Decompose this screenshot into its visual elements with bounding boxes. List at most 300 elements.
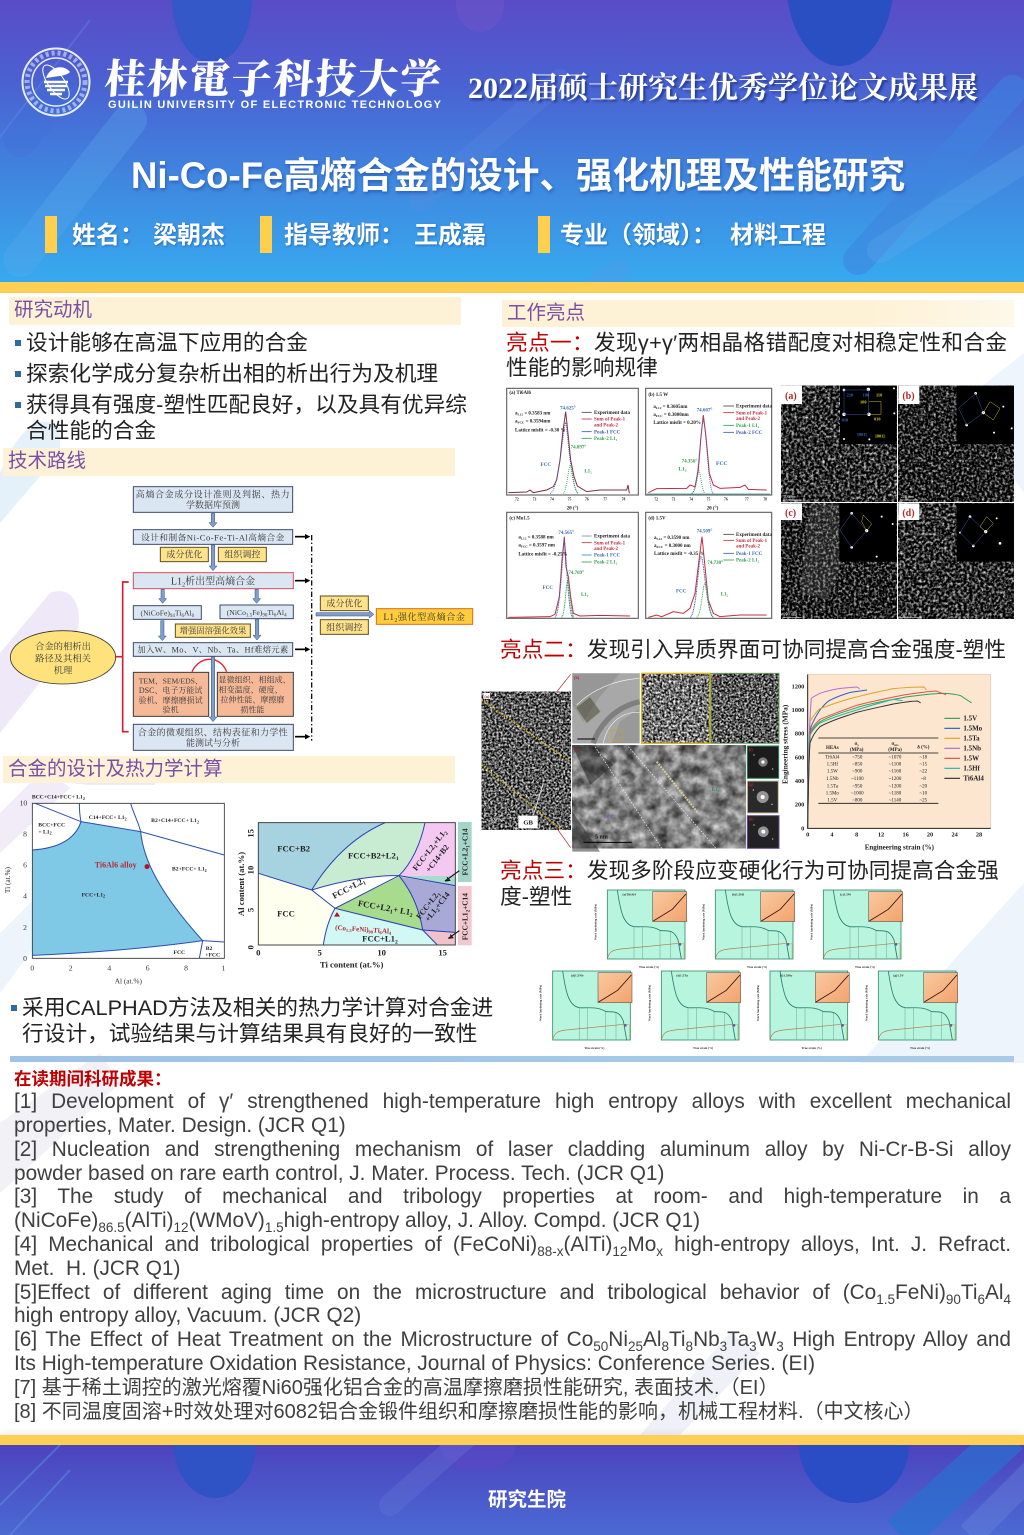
university english name: GUILIN UNIVERSITY OF ELECTRONIC TECHNOLOGY [108, 99, 442, 111]
flowchart: technical route: 相变温度、硬度、 [219, 685, 283, 695]
flowchart: technical route: (NiCoFe) [141, 608, 170, 617]
micrograph: TEM a: 100 [860, 399, 866, 404]
chart: XRD a: Experiment data [594, 411, 630, 416]
chart: XRD d: = 0.3000 nm [663, 544, 691, 549]
chart: Ti-Al phase diagram right: 1 [433, 843, 440, 850]
chart: engineering stress-strain curves: 28 [976, 831, 982, 838]
chart: XRD b: a [653, 413, 656, 418]
chart: engineering stress-strain curves: ~10 [919, 792, 928, 797]
flowchart: technical route: 90 [262, 614, 268, 619]
section heading: work highlights: 工作亮点 [507, 302, 585, 324]
chart: Ti-Al phase diagram left: 6 [23, 861, 27, 870]
flowchart: technical route: 6 [181, 614, 184, 619]
chart: XRD c: = 0.3597 nm [528, 544, 556, 549]
footer organisation name: 研究生院 [488, 1489, 566, 1511]
flowchart: technical route: DSC、电子万能试 [139, 685, 202, 695]
chart: Ti-Al phase diagram right: 2 [466, 909, 471, 912]
chart: XRD b: FCC [656, 414, 663, 418]
chart: Ti-Al phase diagram left: B2 [206, 946, 212, 952]
chart: Ti-Al phase diagram right: FCC+B2+L2 [348, 850, 396, 860]
chart: Ti-Al phase diagram right: 10 [377, 948, 386, 958]
publications list: [7] 基于稀土调控的激光熔覆Ni60强化铝合金的高温摩擦磨损性能研究, 表面技术.（EI） [14, 1377, 778, 1399]
publications list: high entropy alloy, Vacuum. (JCR Q2) [14, 1304, 361, 1327]
micrograph: TEM a: 200 nm [783, 494, 797, 499]
chart: Ti-Al phase diagram left: 2 [23, 923, 27, 932]
chart: Ti-Al phase diagram right: FCC+L2 [331, 877, 364, 901]
chart: engineering stress-strain curves: ~1180 [889, 792, 902, 797]
chart: Ti-Al phase diagram left: 8 [23, 830, 27, 839]
chart: 1.5W: Work hardening rate (MPa) [809, 904, 813, 940]
flowchart: technical route: 拉伸性能、摩擦磨 [220, 695, 284, 705]
highlight one text: 性能的影响规律 [506, 355, 658, 380]
chart: Ti-Al phase diagram left: 2 [197, 819, 199, 824]
chart: XRD b: 73 [672, 498, 675, 502]
university logo [22, 48, 90, 116]
micrograph: TEM a: [001] [857, 432, 867, 437]
chart: XRD a: FCC [518, 421, 525, 425]
chart: XRD d: Lattice misfit = -0.35 % [654, 552, 704, 557]
chart: XRD d [646, 512, 772, 618]
chart: engineering stress-strain curves: Ti6Al4 [825, 755, 840, 760]
image c: (c) [643, 675, 648, 680]
chart: Ti-Al phase diagram right: FCC+L2 [411, 843, 437, 872]
image e: (e) [574, 747, 579, 752]
flowchart: technical route: 设计和制备Ni-Co-Fe-Ti-Al高熵合金 [141, 531, 285, 542]
publications list: [4] Mechanical and tribological properties of (FeCoNi)88-x(AlTi)12Mox high-entropy alloys, Int. J. Refract. [14, 1233, 1011, 1259]
micrograph: TEM c: 200 nm [783, 611, 797, 616]
flowchart: technical route: 6 [192, 614, 195, 619]
flowchart: technical route: Fe) [252, 608, 263, 617]
chart: engineering stress-strain curves: 1200 [792, 683, 804, 690]
image h [747, 816, 779, 848]
motivation bullet list: 获得具有强度-塑性匹配良好，以及具有优异综 [26, 392, 467, 417]
CALPHAD statement: 采用CALPHAD方法及相关的热力学计算对合金进 [22, 995, 493, 1020]
highlight two text: 亮点二：发现引入异质界面可协同提高合金强度-塑性 [500, 637, 1006, 662]
chart: engineering stress-strain curves: ~1000 [851, 792, 864, 797]
chart: engineering stress-strain curves: 400 [795, 778, 804, 785]
chart: Ti-Al phase diagram right: 1 [437, 892, 443, 898]
micrograph: TEM b: (b) [902, 391, 915, 402]
micrograph: TEM c: (c) [785, 508, 796, 519]
flowchart: technical route: 增强固溶强化效果 [180, 625, 247, 635]
chart: engineering stress-strain curves: (MPa) [850, 748, 864, 753]
chart: XRD c: and Peak-2 [594, 547, 619, 552]
highlight one text: 亮点一：发现γ+γ′两相晶格错配度对相稳定性和合金 [506, 330, 1007, 355]
chart: Ti-Al phase diagram left: Al (at.%) [115, 976, 143, 985]
chart: engineering stress-strain curves: 1.5Hf [827, 763, 838, 768]
flowchart: technical route: 2 [182, 581, 185, 588]
chart: engineering stress-strain curves: ~1100 [889, 763, 902, 768]
chart: XRD b: (b) 1.5 W [648, 393, 668, 398]
chart: XRD a: 76 [585, 498, 589, 502]
chart: 1.5W: True strain (%) [855, 965, 875, 969]
chart: 1.5Nb [539, 971, 632, 1050]
chart: XRD a: (a) Ti6Al6 [509, 391, 531, 396]
chart: 1.5Mo [756, 971, 849, 1050]
chart: XRD a: a [515, 411, 518, 416]
chart: XRD a: 75 [568, 498, 571, 502]
chart: XRD c: Lattice misfit = -0.25% [518, 552, 568, 557]
chart: engineering stress-strain curves: 24 [952, 831, 959, 838]
XRD plots and TEM micrographs [506, 386, 1014, 619]
chart: Ti-Al phase diagram right [236, 822, 472, 970]
chart: XRD d: 74.730° [707, 561, 723, 566]
chart: 1.5Mo: (f)1.5Mo [780, 973, 793, 977]
author info row: 专业（领域）： [560, 222, 716, 249]
image e: L1₂ [712, 788, 720, 793]
micrograph: TEM d [898, 503, 1014, 619]
image e [572, 745, 746, 852]
chart: XRD b: Peak-1 L1₂ [736, 424, 760, 429]
chart: XRD c: 74.565° [558, 531, 574, 536]
chart: engineering stress-strain curves: 0 [801, 825, 804, 832]
micrograph: TEM a: 110 [876, 393, 882, 398]
section heading: work highlights [502, 300, 1014, 327]
publications list: [2] Nucleation and strengthening mechanism of laser cladding aluminum alloy by Ni-Cr-B-Si alloy [14, 1138, 1011, 1161]
micrograph: TEM a: 010 [874, 417, 880, 422]
chart: XRD a: L1₂ [584, 470, 592, 475]
chart: Ti6Al4 [593, 890, 687, 969]
chart: XRD b: = 0.3605nm [661, 405, 688, 410]
chart: engineering stress-strain curves: 0 [806, 831, 809, 838]
chart: Ti-Al phase diagram right: 1 [466, 845, 471, 848]
chart: XRD a: a [515, 420, 518, 425]
chart: engineering stress-strain curves: 1.5V [963, 715, 977, 723]
image a: (a) [484, 694, 490, 699]
chart: XRD c: (c) Mo1.5 [509, 516, 530, 521]
chart: XRD a: 2θ (°) [567, 506, 579, 511]
chart: Ti-Al phase diagram left: 2 [103, 894, 105, 899]
chart: engineering stress-strain curves: (MPa) [888, 748, 902, 753]
chart: engineering stress-strain curves: 8 [855, 831, 858, 838]
highlight three text: 亮点三：发现多阶段应变硬化行为可协同提高合金强 [500, 858, 999, 883]
chart: engineering stress-strain curves: 1.5W [963, 755, 979, 763]
chart: Ti-Al phase diagram right: 5 [318, 948, 323, 958]
chart: 1.5V: True strain (%) [910, 1046, 930, 1050]
micrograph: TEM a [781, 386, 897, 502]
micrograph: TEM a: 010 [842, 418, 848, 423]
chart: XRD a [507, 388, 638, 511]
chart: XRD a: Peak-1 FCC [594, 430, 621, 435]
flowchart: technical route: 1.5 [246, 614, 253, 619]
chart: XRD a: 74.625° [560, 406, 576, 411]
header banner [0, 0, 1024, 282]
chart: engineering stress-strain curves: Ti6Al4 [963, 775, 984, 783]
chart: 1.5Hf [701, 890, 795, 969]
image d: (d) [712, 675, 718, 680]
chart: XRD b: L12 [656, 406, 662, 410]
image g [747, 781, 778, 813]
chart: XRD a: = 0.3594nm [524, 420, 551, 425]
chart: Ti-Al phase diagram right: +L1 [423, 907, 439, 923]
chart: XRD b: = 0.3000nm [663, 413, 690, 418]
chart: XRD a: L12 [518, 412, 523, 416]
chart: Ti-Al phase diagram right: (Co [335, 924, 346, 932]
chart: Ti-Al phase diagram left: 0 [23, 954, 27, 963]
chart: Ti-Al phase diagram left: BCC+FCC [38, 823, 65, 829]
chart: Ti-Al phase diagram right: 2 [435, 907, 442, 913]
chart: 1.5W [809, 890, 903, 969]
chart: XRD c: L1₂ [581, 593, 589, 598]
chart: Ti-Al phase diagram right: 0 [256, 948, 260, 958]
micrograph: TEM d: (d) [902, 508, 915, 519]
chart: XRD b: and Peak-2 [736, 417, 761, 422]
publications list: Met. H. (JCR Q1) [14, 1257, 180, 1280]
section heading: research motivation: 研究动机 [14, 299, 92, 321]
chart: engineering stress-strain curves: ~20 [919, 784, 928, 789]
publications list: (NiCoFe)86.5(AlTi)12(WMoV)1.5high-entropy alloy, J. Alloy. Compd. (JCR Q1) [14, 1209, 700, 1235]
chart: Ti-Al phase diagram right: FCC+L2 [414, 891, 440, 921]
chart: XRD a: Sum of Peak-1 [594, 418, 626, 423]
chart: XRD b: 2θ (°) [707, 506, 719, 511]
author info row: 梁朝杰 [153, 222, 225, 249]
chart: 1.5Ta: True strain (%) [693, 1046, 713, 1050]
flowchart: technical route: 析出型高熵合金 [185, 574, 255, 587]
chart: XRD b: Lattice misfit = 0.20% [653, 421, 701, 426]
chart: engineering stress-strain curves: δ (%) [917, 745, 930, 750]
motivation bullet list: 探索化学成分复杂析出相的析出行为及机理 [26, 361, 438, 386]
section heading: alloy design and thermodynamic calculation [3, 756, 455, 783]
chart: engineering stress-strain curves: ~1200 [889, 784, 902, 789]
chart: 1.5Mo: True strain (%) [802, 1046, 822, 1050]
micrograph: TEM a: [001] [875, 433, 885, 438]
chart: Ti6Al4: True strain (%) [639, 965, 659, 969]
flowchart: technical route: Al [276, 608, 284, 617]
chart: engineering stress-strain curves: 1.5Hf [963, 765, 981, 773]
flowchart: technical route: 组织调控 [224, 549, 260, 560]
chart: Ti6Al4: (a)Ti6Al4 [622, 892, 636, 896]
chart: engineering stress-strain curves: ~950 [852, 784, 863, 789]
image a: GB [523, 819, 534, 826]
chart: engineering stress-strain curves: σ [854, 742, 857, 747]
chart: XRD a: Peak-2 L1₂ [594, 437, 618, 442]
chart: Ti-Al phase diagram right: 90 [368, 930, 374, 936]
flowchart: technical route: L1 [171, 576, 182, 587]
chart: XRD a: FCC [541, 463, 551, 468]
chart: Ti-Al phase diagram right: 5 [245, 907, 255, 912]
chart: Ti-Al phase diagram left: 2 [83, 796, 85, 801]
chart: XRD c [507, 512, 638, 618]
chart: Ti-Al phase diagram left: 8 [184, 963, 188, 972]
flowchart: technical route: Al [184, 608, 192, 617]
chart: 1.5Ta: Work hardening rate (MPa) [647, 985, 651, 1021]
publications list: [8] 不同温度固溶+时效处理对6082铝合金锻件组织和摩擦磨损性能的影响，机械工程材料.（中文核心） [14, 1401, 924, 1423]
chart: engineering stress-strain curves: 16 [903, 831, 909, 838]
chart: Ti-Al phase diagram right: FCC+L1 [362, 934, 395, 944]
micrograph: TEM a: (a) [785, 391, 797, 402]
publications list: [5]Effect of different aging time on the microstructure and tribological behavior of (Co1.5FeNi)90Ti6Al4 [14, 1281, 1011, 1307]
chart: XRD c: FCC [543, 586, 553, 591]
micrograph: TEM c [781, 503, 897, 619]
chart: XRD d: a [654, 544, 656, 549]
chart: engineering stress-strain curves: ~750 [852, 755, 863, 760]
chart: Ti-Al phase diagram left: 2 [125, 816, 127, 821]
chart: XRD b: Experiment data [736, 405, 772, 410]
chart: XRD d: 74.509° [697, 530, 712, 535]
flowchart: technical route: 验机、摩擦磨损试 [139, 695, 203, 705]
micrograph: TEM b: 200 nm [901, 494, 914, 499]
chart: Ti-Al phase diagram right: 2 [443, 830, 450, 836]
flowchart: technical route: 能测试与分析 [186, 737, 240, 748]
chart: engineering stress-strain curves: ~25 [919, 799, 928, 804]
publications list: powder based on rare earth control, J. Mater. Process. Tech. (JCR Q1) [14, 1162, 664, 1185]
chart: engineering stress-strain curves: 800 [795, 731, 804, 738]
flowchart: technical route: 6 [274, 614, 277, 619]
chart: Ti-Al phase diagram right: 1.5 [346, 929, 353, 934]
chart: engineering stress-strain curves: 1.5Ta [827, 784, 839, 789]
chart: Ti-Al phase diagram left: 6 [146, 963, 150, 972]
chart: XRD c: L12 [521, 536, 527, 540]
chart: XRD a: 74.897° [571, 445, 586, 450]
chart: Ti-Al phase diagram right: Ti content (at.%) [320, 960, 384, 970]
image e: FCC [604, 815, 615, 820]
chart: engineering stress-strain curves: 12 [878, 831, 884, 838]
chart: engineering stress-strain curves: Engineering strain (%) [865, 843, 935, 851]
publications list: [1] Development of γ′ strengthened high-temperature high entropy alloys with excellent mechanical [14, 1090, 1011, 1113]
image h: (h) [749, 817, 754, 822]
chart: Ti-Al phase diagram right: FCC+B2 [277, 844, 310, 854]
chart: 1.5Nb: Work hardening rate (MPa) [539, 985, 543, 1021]
chart: engineering stress-strain curves: 200 [795, 802, 804, 809]
publications list [14, 1090, 1011, 1423]
chart: Ti-Al phase diagram left: 0 [30, 963, 34, 972]
chart: Ti-Al phase diagram right: 1 [362, 880, 368, 887]
chart: Ti-Al phase diagram left: C14+FCC+ L1 [89, 815, 125, 821]
chart: Ti-Al phase diagram right: 2 [395, 939, 398, 945]
micrograph: TEM b [898, 386, 1014, 502]
author info row: 材料工程 [730, 222, 826, 249]
chart: Ti-Al phase diagram left: + L1 [38, 829, 50, 835]
chart: Ti-Al phase diagram right: + L1 [392, 904, 411, 917]
motivation bullet list: 设计能够在高温下应用的合金 [26, 330, 308, 355]
chart: Ti-Al phase diagram right: FeNi) [352, 925, 369, 934]
chart: engineering stress-strain curves: 1000 [792, 707, 804, 714]
publications list: [6] The Effect of Heat Treatment on the Microstructure of Co50Ni25Al8Ti8Nb3Ta3W3 High Entropy Alloy and [14, 1328, 1011, 1354]
flowchart: technical route: 损性能 [240, 704, 264, 714]
chart: Ti-Al phase diagram left: 1 [221, 963, 225, 972]
chart: XRD b: 78 [763, 498, 767, 502]
chart: engineering stress-strain curves: ~1100 [851, 777, 864, 782]
section heading: alloy design and thermodynamic calculation: 合金的设计及热力学计算 [8, 758, 223, 780]
chart: Ti-Al phase diagram right: +L1 [431, 830, 447, 846]
flowchart: technical route: 2 [394, 618, 398, 624]
flowchart: technical route: 组织调控 [326, 621, 362, 632]
chart: Ti-Al phase diagram left: 2 [205, 868, 207, 873]
author info row: 指导教师： [284, 222, 404, 249]
chart: XRD b: a [653, 405, 656, 410]
chart: 1.5Mo: Work hardening rate (MPa) [756, 985, 760, 1021]
image e: 5 nm [595, 834, 608, 840]
chart: Ti-Al phase diagram right: 1 [396, 856, 399, 862]
image a [482, 692, 571, 830]
micrograph: TEM d: 200 nm [901, 611, 914, 616]
CALPHAD statement: 行设计，试验结果与计算结果具有良好的一致性 [22, 1021, 477, 1046]
chart: XRD c: 74.769° [568, 571, 584, 576]
author info row: 王成磊 [414, 222, 486, 249]
chart: XRD c: Sum of Peak-1 [594, 541, 626, 546]
chart: XRD d: L1₂ [721, 592, 729, 597]
chart: XRD a: Lattice misfit = -0.30 % [515, 428, 565, 433]
flowchart: technical route: 验机 [163, 704, 179, 714]
image f [747, 746, 779, 778]
image a: 500 nm [490, 818, 504, 823]
chart: Ti-Al phase diagram right: 2 [409, 913, 413, 919]
micrographs: heterogeneous interface [481, 672, 780, 852]
poster title: Ni-Co-Fe高熵合金的设计、强化机理及性能研究 [131, 155, 905, 196]
section heading: technical route: 技术路线 [8, 450, 86, 472]
chart: XRD c: = 0.3588 nm [526, 535, 555, 540]
chart: engineering stress-strain curves: ~18 [919, 755, 928, 760]
chart: XRD b: FCC [716, 461, 728, 467]
exhibition title: 2022届硕士研究生优秀学位论文成果展 [468, 72, 978, 105]
chart: Ti-Al phase diagram left [3, 795, 225, 985]
chart: XRD b: 74.356° [682, 459, 697, 464]
chart: XRD d: Peak-1 FCC [736, 552, 763, 557]
chart: Ti-Al phase diagram left: 2 [50, 831, 52, 836]
flowchart: technical route: 4 [284, 614, 287, 619]
chart: 1.5Ta [647, 971, 741, 1050]
chart: engineering stress-strain curves: 1.5Mo [963, 725, 983, 733]
flowchart: technical route: 合金的微观组织、结构表征和力学性 [138, 726, 288, 737]
chart: 1.5Nb: (d)1.5Nb [571, 973, 584, 977]
top yellow band [0, 282, 1024, 293]
chart: Ti-Al phase diagram right: +C14 [461, 893, 470, 910]
chart: engineering stress-strain curves: ~800 [852, 799, 863, 804]
flowchart: technical route: L1 [383, 613, 394, 623]
chart: engineering stress-strain curves: ~850 [852, 763, 863, 768]
chart: XRD d: FCC [656, 545, 664, 549]
chart: 1.5V [864, 971, 958, 1050]
chart: XRD c: Experiment data [594, 535, 630, 540]
chart: Ti-Al phase diagram left: BCC+C14+FCC+ L1 [32, 795, 83, 801]
flowchart: technical route: 机理 [54, 665, 73, 677]
chart: XRD a: = 0.3583 nm [523, 411, 551, 416]
publications heading: 在读期间科研成果： [14, 1069, 172, 1089]
chart: XRD d: Peak-2 L1₂ [736, 559, 760, 564]
chart: XRD b: 75 [707, 498, 710, 502]
chart: XRD a: 74 [550, 498, 554, 502]
section heading: technical route [3, 448, 455, 476]
image g: (g) [749, 782, 754, 787]
chart: 1.5Hf: (b)1.5Hf [732, 892, 745, 896]
flowchart: technical route: 显微组织、相组成、 [219, 674, 291, 684]
flowchart: technical route: 路径及其相关 [35, 653, 91, 665]
chart: XRD b: 74 [689, 498, 693, 502]
chart: Ti-Al phase diagram right: FCC+L2 [357, 898, 391, 914]
chart: Ti-Al phase diagram left: Ti (at.%) [3, 866, 12, 893]
chart: Ti-Al phase diagram right: 10 [245, 866, 255, 874]
chart: XRD a: 77 [603, 498, 607, 502]
chart: XRD c: a [518, 544, 521, 549]
chart: XRD d: Experiment data [736, 533, 772, 538]
chart: 1.5Ta: (e)1.5Ta [676, 973, 688, 977]
chart: Ti-Al phase diagram right: FCC+L2 [461, 848, 470, 876]
chart: Ti-Al phase diagram right: 15 [245, 828, 255, 838]
chart: XRD d: a [654, 536, 656, 541]
footer banner [0, 1445, 1024, 1535]
chart: engineering stress-strain curves: ~1200 [889, 777, 902, 782]
chart: engineering stress-strain curves: 1.5Mo [826, 792, 839, 797]
chart: XRD b [646, 388, 772, 511]
chart: Ti-Al phase diagram right: Al content (at.%) [236, 852, 246, 916]
chart: XRD b: 74.607° [697, 409, 712, 414]
chart: XRD b: Sum of Peak-1 [736, 411, 768, 416]
flowchart: technical route: (NiCo [227, 608, 246, 617]
chart: Ti-Al phase diagram left: B2+C14+FCC+ L1 [151, 818, 197, 824]
chart: Ti-Al phase diagram left: 4 [23, 892, 27, 901]
highlight three text: 度-塑性 [500, 884, 572, 909]
chart: engineering stress-strain curves: ~900 [852, 770, 863, 775]
